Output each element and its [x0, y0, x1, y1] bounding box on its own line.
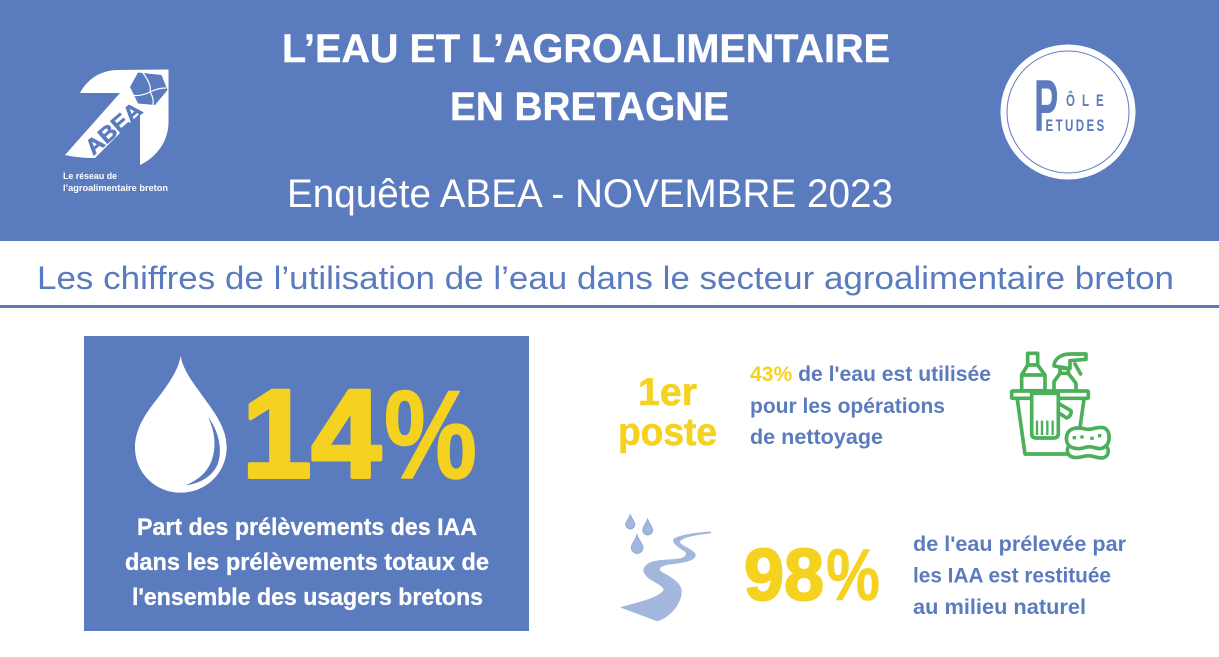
logo: Pôle Etudes: [1000, 44, 1136, 180]
title: [282, 27, 890, 129]
text: water returned: les IAA est restituée: [913, 564, 1111, 588]
logo: ABEA: [63, 70, 168, 193]
text: water returned: de l'eau prélevée par: [913, 533, 1126, 556]
icon: river and rain drops: [620, 514, 711, 621]
logo: Pôle Etudes: ÔLE: [1066, 90, 1111, 111]
text: water returned: au milieu naturel: [913, 596, 1086, 619]
section heading: Les chiffres de l’utilisation de l’eau dans le secteur agroalimentaire breton: [37, 260, 1174, 296]
text: panel description: l'ensemble des usagers bretons: [132, 584, 483, 611]
text: panel description: Part des prélèvements des IAA: [137, 514, 477, 541]
title: L’EAU ET L’AGROALIMENTAIRE: [282, 27, 890, 71]
stat: 14%: 14: [242, 365, 381, 504]
drops: [626, 514, 653, 553]
logo: Pôle Etudes: ETUDES: [1046, 117, 1107, 136]
logo: ABEA: l’agroalimentaire breton: [63, 183, 168, 193]
stat: 14%: %: [384, 366, 477, 505]
icon: water drop: [135, 356, 227, 493]
logo: ABEA: ABEA: [80, 97, 147, 160]
text: cleaning operations: de nettoyage: [750, 426, 883, 449]
logo: Pôle Etudes: P: [1034, 66, 1058, 147]
stat: 1er poste: [618, 371, 717, 454]
survey subtitle: Enquête ABEA - NOVEMBRE 2023: [287, 172, 893, 216]
panel: 14 percent: [84, 336, 529, 631]
stat: 98%: [744, 535, 880, 616]
title: EN BRETAGNE: [450, 85, 729, 129]
text: cleaning operations: 43% de l'eau est utilisée: [750, 363, 991, 386]
header band: [0, 0, 1219, 241]
icon: cleaning bucket: [1012, 353, 1109, 458]
stat: 98%: %: [826, 535, 880, 616]
text: cleaning operations: pour les opérations: [750, 395, 945, 418]
text: panel description: [125, 514, 489, 611]
stat: 1er poste: poste: [618, 411, 717, 454]
stat: 98%: 98: [744, 535, 824, 616]
logo: ABEA: Le réseau de: [63, 171, 117, 181]
stat: 14%: [242, 365, 477, 505]
stat: 1er poste: 1er: [638, 371, 697, 414]
text: water returned: [913, 533, 1126, 619]
text: cleaning operations: [750, 363, 991, 449]
text: panel description: dans les prélèvements totaux de: [125, 549, 489, 576]
